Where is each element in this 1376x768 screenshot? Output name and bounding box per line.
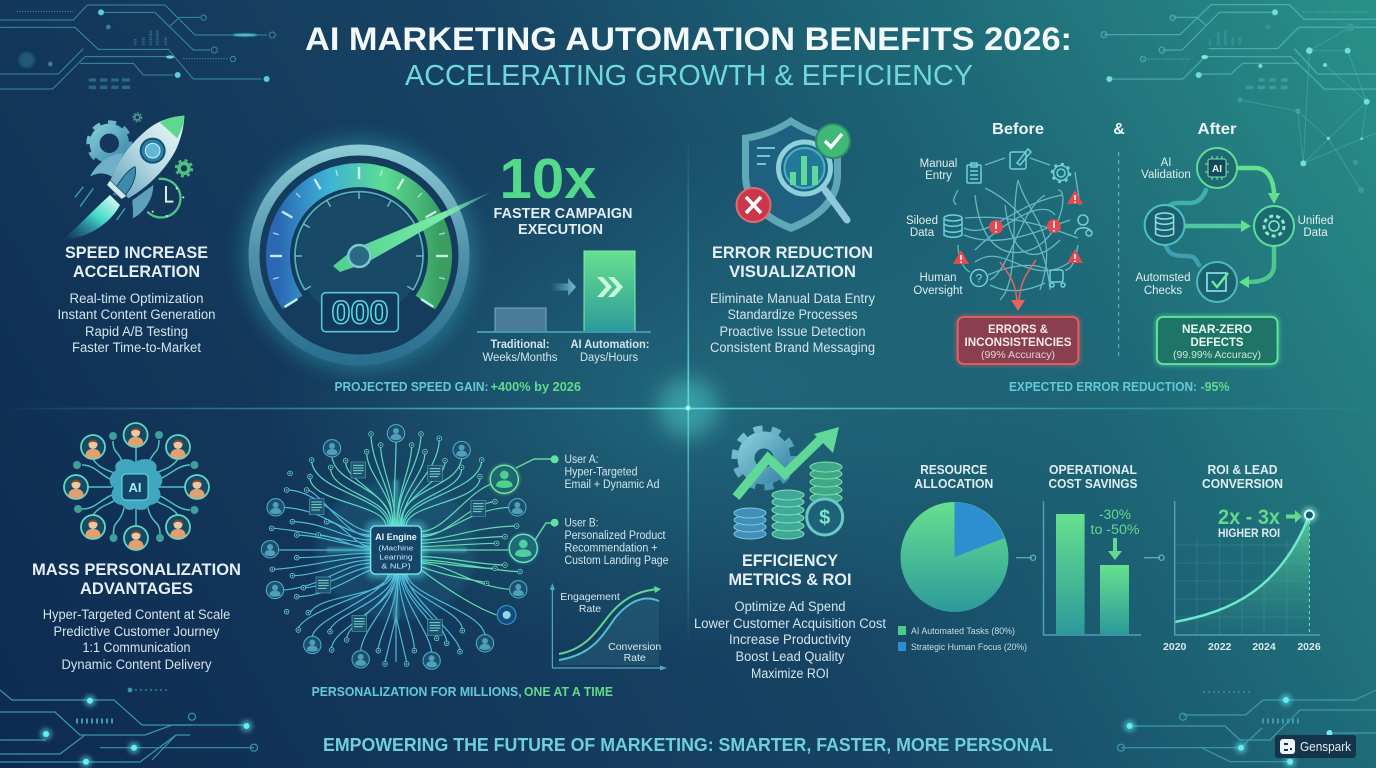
icon: clipboard [967, 163, 981, 183]
diagram: AI engine network [261, 425, 539, 669]
panel: efficiency metrics [694, 427, 1321, 681]
benefit list: Increase Productivity [729, 632, 851, 647]
benefit list: Lower Customer Acquisition Cost [694, 616, 886, 631]
benefit list [58, 291, 216, 355]
chart: resource allocation pie: RESOURCE [920, 462, 988, 477]
callout: near-zero defects [1157, 317, 1278, 364]
callout: near-zero defects: NEAR-ZERO [1182, 322, 1252, 336]
bar comparison: Weeks/Months [482, 352, 558, 364]
AI engine core: AI Engine [375, 532, 417, 542]
icon: database [944, 215, 962, 237]
node: AI validation: AI [1212, 164, 1222, 175]
labels: Entry [925, 170, 952, 182]
stat: 10x: FASTER CAMPAIGN [494, 205, 632, 222]
benefit list: 1:1 Communication [82, 640, 190, 655]
stat: 10x [494, 147, 632, 238]
callout: user A: Hyper-Targeted [564, 466, 638, 478]
heading: MASS PERSONALIZATION [32, 560, 241, 579]
speedometer gauge [243, 139, 491, 371]
callout: near-zero defects: (99.99% Accuracy) [1173, 349, 1261, 361]
callout: user A [516, 454, 660, 491]
bar comparison: Days/Hours [580, 352, 638, 364]
heading: VISUALIZATION [729, 262, 856, 281]
callout: user B: Recommendation + [564, 542, 658, 554]
digital readout: 000 [332, 294, 388, 330]
digital readout [322, 293, 398, 332]
benefit list: Instant Content Generation [58, 307, 216, 322]
icon: gear, growth arrow and coins: $ [819, 507, 830, 529]
line chart: engagement and conversion: Engagement [560, 591, 620, 603]
icon: AI brain with customer avatars: AI [128, 480, 142, 495]
benefit list: Eliminate Manual Data Entry [710, 291, 875, 306]
circuit decoration: top left [0, 5, 275, 89]
stat: 10x: EXECUTION [518, 221, 603, 238]
diagram: after (unified flow): Data [1303, 227, 1328, 239]
benefit list: Predictive Customer Journey [54, 624, 220, 639]
chart: operational cost savings: to -50% [1090, 522, 1140, 537]
connector [1016, 557, 1032, 559]
chart: ROI and lead conversion: 2x - 3x [1218, 506, 1280, 529]
icon: gear, growth arrow and coins [734, 427, 843, 539]
before and after headers [992, 121, 1236, 138]
benefit list [43, 607, 230, 672]
diagram: after (unified flow): Validation [1141, 169, 1191, 181]
circuit and network decoration: top right [1101, 5, 1376, 193]
icon: person [1075, 215, 1092, 236]
bar comparison [477, 251, 651, 364]
connector [1144, 557, 1160, 559]
callout: errors: INCONSISTENCIES [964, 335, 1072, 349]
callout: user B: Custom Landing Page [564, 555, 668, 567]
AI engine core: & NLP) [381, 562, 411, 571]
icon: gear [1052, 164, 1070, 182]
caption: speed gain: PROJECTED SPEED GAIN: [334, 379, 488, 394]
benefit list: Rapid A/B Testing [85, 324, 188, 339]
heading: EFFICIENCY [742, 551, 839, 570]
bar comparison: Traditional: [490, 339, 550, 351]
heading: ERROR REDUCTION [712, 243, 873, 262]
AI engine core: Learning [379, 552, 413, 561]
before and after headers: Before [992, 121, 1044, 138]
caption: personalization: PERSONALIZATION FOR MILLIONS, [312, 684, 522, 699]
benefit list [694, 599, 886, 681]
callout: near-zero defects: DEFECTS [1190, 335, 1244, 349]
alerts [953, 190, 1083, 264]
caption: error reduction: -95% [1200, 379, 1230, 394]
callout: errors: ERRORS & [988, 322, 1048, 336]
before and after headers: After [1198, 121, 1236, 138]
section dividers [0, 130, 1376, 650]
Genspark badge: Genspark [1300, 739, 1351, 754]
chart: ROI and lead conversion: 2022 [1208, 641, 1232, 653]
heading [728, 551, 852, 589]
chart: ROI and lead conversion: HIGHER ROI [1218, 528, 1280, 540]
circuit decoration: bottom right [1118, 690, 1376, 768]
icon: broken link [1050, 270, 1065, 287]
before and after headers: & [1113, 121, 1125, 138]
icon: rocket [63, 113, 192, 239]
callout: user A: Email + Dynamic Ad [564, 479, 660, 491]
callout: user B: Personalized Product [564, 530, 666, 542]
chart: resource allocation pie: ALLOCATION [914, 476, 993, 491]
AI engine core [367, 522, 425, 578]
chart: resource allocation pie [898, 462, 1027, 653]
callout: user B: User B: [564, 518, 598, 530]
benefit list: Maximize ROI [751, 666, 829, 681]
chart: operational cost savings [1044, 462, 1141, 635]
callout: user B [535, 518, 668, 567]
labels: Human [919, 272, 957, 284]
panel: error reduction [710, 117, 1333, 394]
heading [65, 243, 208, 281]
chart: ROI and lead conversion: 2024 [1252, 641, 1276, 653]
heading: ACCELERATION [73, 262, 200, 281]
labels [906, 158, 963, 297]
title [305, 21, 1072, 92]
diagram: after (unified flow): Checks [1144, 285, 1182, 297]
node: data [1145, 205, 1185, 245]
benefit list: Optimize Ad Spend [734, 599, 846, 614]
node: AI validation [1197, 148, 1237, 188]
callout: errors: (99% Accuracy) [981, 349, 1055, 361]
icon: question [970, 270, 988, 286]
caption: speed gain: +400% by 2026 [490, 379, 581, 394]
diagram: before (tangled process) [906, 149, 1092, 311]
Genspark badge [1275, 735, 1356, 758]
labels: Manual [920, 158, 957, 170]
chart: operational cost savings: COST SAVINGS [1048, 476, 1138, 491]
chart: operational cost savings: -30% [1099, 507, 1131, 522]
icon: pen [1010, 149, 1031, 169]
caption: speed gain [334, 379, 581, 394]
line chart: engagement and conversion: Conversion [608, 641, 661, 653]
chart: ROI and lead conversion: 2020 [1163, 641, 1187, 653]
icon: AI brain with customer avatars [64, 423, 209, 550]
diagram: after (unified flow): AI [1161, 157, 1171, 169]
heading: METRICS & ROI [728, 570, 852, 589]
heading: SPEED INCREASE [65, 243, 208, 262]
circuit decoration: bottom left [0, 688, 258, 768]
benefit list: Dynamic Content Delivery [62, 657, 212, 672]
caption: personalization: ONE AT A TIME [524, 684, 613, 699]
highlighted user avatars [488, 463, 539, 564]
labels: Data [910, 227, 935, 239]
bar comparison: AI Automation: [570, 339, 650, 351]
node: checks [1197, 262, 1237, 302]
benefit list: Hyper-Targeted Content at Scale [43, 607, 230, 622]
line chart: engagement and conversion: Rate [624, 652, 646, 664]
callout: user A: User A: [564, 454, 598, 466]
benefit list: Faster Time-to-Market [72, 340, 201, 355]
chart: ROI and lead conversion: ROI & LEAD [1208, 462, 1278, 477]
node: unified data [1254, 206, 1294, 246]
diagram: after (unified flow): Unified [1298, 215, 1333, 227]
stat: 10x: 10x [500, 147, 597, 211]
benefit list: Boost Lead Quality [736, 649, 845, 664]
footer tagline: EMPOWERING THE FUTURE OF MARKETING: SMARTER, FASTER, MORE PERSONAL [323, 735, 1053, 755]
title: ACCELERATING GROWTH & EFFICIENCY [405, 60, 973, 92]
panel: mass personalization [32, 423, 668, 699]
benefit list [710, 291, 875, 355]
heading: ADVANTAGES [80, 579, 193, 598]
caption: error reduction: EXPECTED ERROR REDUCTION: [1009, 379, 1197, 394]
heading [32, 560, 241, 598]
icon: error badge [736, 188, 770, 222]
diagram: after (unified flow): Automsted [1136, 272, 1190, 284]
arrow [550, 278, 576, 296]
benefit list: Consistent Brand Messaging [710, 340, 875, 355]
needle [333, 192, 491, 272]
icon: question: ? [976, 272, 983, 286]
line chart: engagement and conversion [550, 583, 667, 670]
chart: ROI and lead conversion: 2026 [1297, 641, 1321, 653]
icon: shield with magnifier [736, 117, 850, 232]
chart: ROI and lead conversion [1163, 462, 1321, 653]
benefit list: Standardize Processes [728, 307, 858, 322]
panel: speed increase [58, 113, 651, 394]
chart: resource allocation pie: Strategic Human Focus (20%) [911, 642, 1027, 653]
avatars [261, 425, 527, 669]
chart: operational cost savings: OPERATIONAL [1049, 462, 1137, 477]
diagram: after (unified flow) [1136, 148, 1333, 302]
labels: Oversight [913, 285, 963, 297]
chart: ROI and lead conversion: CONVERSION [1202, 476, 1283, 491]
icon: check badge [816, 124, 850, 158]
labels: Siloed [906, 215, 938, 227]
title: AI MARKETING AUTOMATION BENEFITS 2026: [305, 21, 1072, 57]
line chart: engagement and conversion: Rate [579, 603, 601, 615]
benefit list: Real-time Optimization [70, 291, 204, 306]
callout: errors [958, 317, 1078, 364]
chart: resource allocation pie: AI Automated Tasks (80%) [911, 626, 1015, 637]
heading [712, 243, 873, 281]
benefit list: Proactive Issue Detection [720, 324, 866, 339]
AI engine core: (Machine [378, 544, 413, 553]
